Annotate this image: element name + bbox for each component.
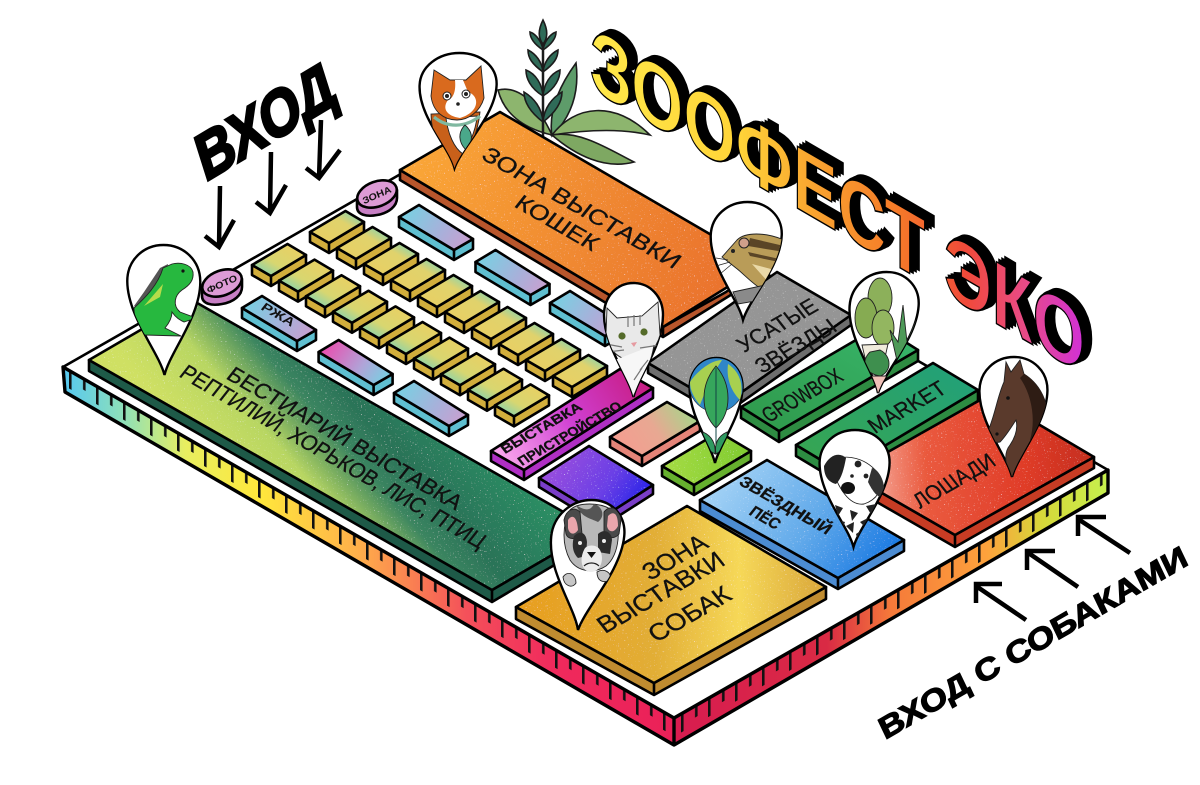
title: ЗООФЕСТ ЭКО bbox=[590, 3, 1094, 395]
pin: earth leaf bbox=[688, 358, 744, 463]
panel: dog zone bbox=[516, 506, 826, 695]
label: horses: ЛОШАДИ bbox=[908, 450, 1001, 513]
label: dog zone: ЗОНА bbox=[636, 529, 714, 585]
label: bestiary: БЕСТИАРИЙ ВЫСТАВКА bbox=[222, 362, 468, 515]
arrows: dog entrance bbox=[976, 517, 1130, 620]
panel: market bbox=[796, 363, 978, 483]
panel: small green block bbox=[662, 432, 751, 495]
label: star dog: ПЁС bbox=[746, 503, 785, 533]
coin: ЗОНА bbox=[353, 175, 401, 216]
label: whiskered stars: УСАТЫЕ bbox=[732, 295, 823, 357]
panel: reptile bestiary bbox=[89, 300, 595, 602]
stall: РЖА bbox=[242, 296, 316, 351]
label: bestiary: РЕПТИЛИЙ, ХОРЬКОВ, ЛИС, ПТИЦ bbox=[175, 360, 492, 554]
label: dog zone: ВЫСТАВКИ bbox=[591, 546, 730, 638]
label: dog zone: СОБАК bbox=[642, 581, 737, 647]
panel: cat zone bbox=[400, 112, 763, 337]
label: adoption exhibition: ВЫСТАВКА bbox=[498, 400, 586, 457]
stalls: upper row bbox=[310, 211, 607, 397]
platform base bbox=[63, 119, 1108, 745]
coin: ФОТО: ФОТО bbox=[206, 273, 239, 296]
label: star dog: ЗВЁЗДНЫЙ bbox=[736, 473, 835, 538]
label: adoption exhibition: ПРИСТРОЙСТВО bbox=[514, 398, 625, 469]
coin: ФОТО bbox=[198, 264, 246, 305]
coin: ЗОНА: ЗОНА bbox=[361, 185, 394, 207]
label: cat zone: КОШЕК bbox=[510, 191, 604, 256]
plant behind cat zone bbox=[498, 20, 650, 164]
stall: РЖА: РЖА bbox=[258, 300, 299, 329]
label: cat zone: ЗОНА ВЫСТАВКИ bbox=[477, 143, 686, 274]
panel: adoption exhibition bbox=[491, 369, 653, 480]
heading: entrance with dogs: ВХОД С СОБАКАМИ bbox=[874, 540, 1193, 746]
panel: whiskered stars zone bbox=[648, 272, 851, 416]
pin: kitten bbox=[604, 283, 663, 397]
label: whiskered stars bbox=[732, 295, 842, 378]
pin: cat bbox=[416, 53, 498, 170]
pin: iguana bbox=[127, 245, 201, 375]
heading: ВХОД: ВХОД bbox=[188, 48, 343, 196]
pin: plants bbox=[844, 272, 921, 393]
arrows: main entrance bbox=[205, 120, 340, 247]
stalls: lower row bbox=[252, 244, 549, 426]
panel: small pink block bbox=[610, 402, 700, 466]
label: whiskered stars: ЗВЁЗДЫ bbox=[750, 315, 842, 378]
pin: horse bbox=[978, 357, 1048, 477]
panel: horses zone bbox=[849, 395, 1094, 547]
pin: french bulldog bbox=[550, 498, 626, 630]
pin: dalmatian bbox=[818, 430, 890, 547]
panel: star dog zone bbox=[700, 460, 904, 589]
label: growbox: GROWBOX bbox=[757, 365, 848, 427]
label: market: MARKET bbox=[863, 377, 952, 438]
panel: growbox bbox=[741, 326, 918, 442]
stalls: blue bars bbox=[319, 205, 624, 436]
panel: small purple-blue block bbox=[539, 446, 653, 526]
pin: chipmunk bbox=[708, 202, 784, 320]
